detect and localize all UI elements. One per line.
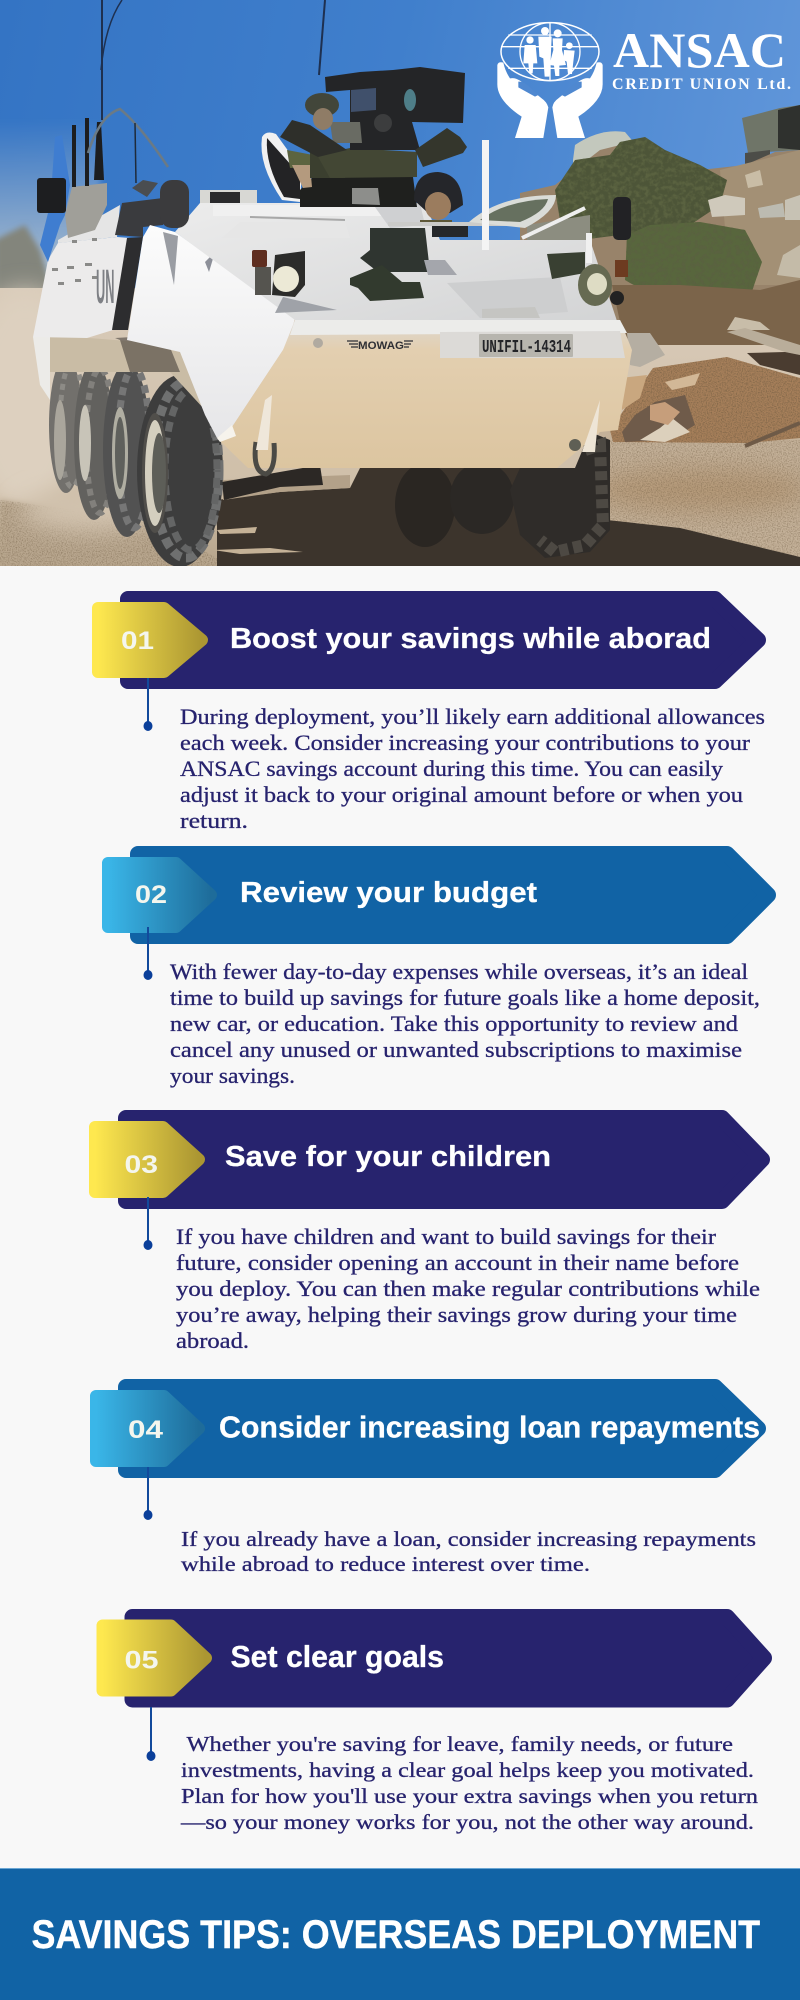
tip 05 bbox=[102, 1617, 764, 1834]
text: 03: future, consider opening an account in their name before bbox=[176, 1250, 739, 1275]
left wheels bbox=[49, 372, 80, 493]
connector: 01 bbox=[144, 678, 152, 731]
banner: 02 bbox=[138, 854, 768, 936]
front-left angled panel bbox=[127, 225, 295, 438]
roof radio and handle bbox=[350, 228, 457, 301]
badge: 04 bbox=[96, 1396, 199, 1461]
lower hull bbox=[217, 320, 632, 468]
rear wheels bbox=[395, 463, 455, 547]
banner: 04 bbox=[126, 1387, 758, 1470]
tip 04 bbox=[96, 1387, 760, 1576]
dish and post bbox=[469, 140, 590, 250]
icon: globe with family in caring hands bbox=[497, 23, 603, 138]
text: 02: With fewer day-to-day expenses while overseas, it’s an ideal bbox=[170, 959, 748, 984]
number: 03: 03 bbox=[124, 1151, 158, 1179]
connector: 02 bbox=[144, 927, 152, 980]
text: 02 bbox=[170, 959, 760, 1088]
seat and turret bbox=[261, 67, 467, 207]
icon: family figures bbox=[523, 27, 575, 77]
text: 05 bbox=[180, 1732, 759, 1834]
tip 01 bbox=[98, 599, 765, 833]
connector: 05 bbox=[146, 1707, 156, 1761]
text: 02: cancel any unused or unwanted subscriptions to maximise bbox=[170, 1037, 742, 1062]
MOWAG badge bbox=[347, 340, 413, 349]
hero photo: armoured vehicle on a dirt road bbox=[0, 0, 800, 567]
logo tagline: CREDIT UNION Ltd. bbox=[612, 76, 791, 93]
heading: 02: Review your budget bbox=[240, 877, 537, 909]
badge: 02 bbox=[108, 863, 211, 927]
text: 01: During deployment, you’ll likely earn additional allowances bbox=[180, 704, 765, 729]
connector: 03 bbox=[144, 1197, 152, 1250]
second crewman bbox=[414, 172, 463, 226]
text: 05: investments, having a clear goal helps keep you motivated. bbox=[181, 1758, 754, 1782]
badge: 03 bbox=[95, 1127, 199, 1192]
tip 02 bbox=[108, 854, 768, 1088]
text: 02: new car, or education. Take this opportunity to review and bbox=[170, 1011, 738, 1036]
roof hatch fittings bbox=[482, 307, 540, 318]
text: 03: you’re away, helping their savings grow during your time bbox=[176, 1302, 737, 1327]
heading: 01: Boost your savings while aborad bbox=[230, 623, 711, 655]
front left wheel bbox=[137, 375, 223, 567]
tip 03 bbox=[95, 1118, 762, 1353]
banner: 01 bbox=[128, 599, 758, 681]
text: 03 bbox=[176, 1224, 760, 1353]
logo wordmark: ANSAC bbox=[613, 22, 786, 78]
mirror bbox=[132, 180, 257, 228]
text: 01 bbox=[180, 704, 765, 833]
under-vehicle shadow bbox=[217, 468, 800, 566]
number: 02: 02 bbox=[135, 881, 167, 909]
far right wheel bbox=[510, 432, 610, 558]
badge: 01 bbox=[98, 608, 202, 672]
text: 01: ANSAC savings account during this time. You can easily bbox=[180, 756, 723, 781]
text: 04 bbox=[181, 1527, 756, 1576]
background tank and tent bbox=[573, 131, 632, 163]
gravel pile bbox=[610, 357, 800, 443]
text: 02: your savings. bbox=[170, 1063, 295, 1088]
text: 02: time to build up savings for future goals like a home deposit, bbox=[170, 985, 760, 1010]
licence plate: UNIFIL-14314 bbox=[482, 338, 571, 358]
text: 01: return. bbox=[180, 808, 248, 833]
text: 03: If you have children and want to build savings for their bbox=[176, 1224, 717, 1249]
antennas, flag and left mast bbox=[37, 0, 325, 262]
number: 01: 01 bbox=[121, 627, 154, 655]
number: 04: 04 bbox=[128, 1416, 163, 1444]
logo: ANSAC Credit Union bbox=[497, 22, 791, 138]
roof and upper plate bbox=[175, 203, 620, 330]
heading: 05: Set clear goals bbox=[230, 1639, 444, 1674]
gravel right bbox=[598, 431, 800, 557]
rail bbox=[388, 222, 513, 226]
left headlight bbox=[252, 250, 337, 313]
tow shackle bbox=[255, 442, 274, 474]
text: 03: you deploy. You can then make regular contributions while bbox=[176, 1276, 760, 1301]
text: 04: If you already have a loan, consider increasing repayments bbox=[181, 1527, 756, 1551]
UN lettering: UN bbox=[96, 261, 114, 314]
hillside bbox=[520, 146, 800, 320]
text: 05: Whether you're saving for leave, family needs, or future bbox=[186, 1732, 733, 1756]
text: 01: each week. Consider increasing your contributions to your bbox=[180, 730, 751, 755]
text: 03: abroad. bbox=[176, 1328, 249, 1353]
licence plate bbox=[479, 334, 573, 358]
ground bbox=[0, 288, 800, 566]
text: 04: while abroad to reduce interest over time. bbox=[181, 1552, 590, 1576]
heading: 04: Consider increasing loan repayments bbox=[219, 1410, 760, 1444]
MOWAG badge: MOWAG bbox=[358, 340, 404, 352]
text: 05: —so your money works for you, not the other way around. bbox=[180, 1810, 754, 1834]
number: 05: 05 bbox=[124, 1646, 159, 1674]
footer band bbox=[0, 1868, 800, 2000]
banner: 05 bbox=[132, 1617, 764, 1700]
connector: 04 bbox=[144, 1467, 152, 1520]
text: 05: Plan for how you'll use your extra savings when you return bbox=[181, 1784, 759, 1808]
text: 01: adjust it back to your original amount before or when you bbox=[180, 782, 743, 807]
banner: 03 bbox=[126, 1118, 762, 1201]
side hull bbox=[33, 198, 205, 410]
badge: 05 bbox=[102, 1626, 206, 1690]
heading: 03: Save for your children bbox=[225, 1141, 551, 1173]
right headlight and box bbox=[547, 197, 631, 306]
